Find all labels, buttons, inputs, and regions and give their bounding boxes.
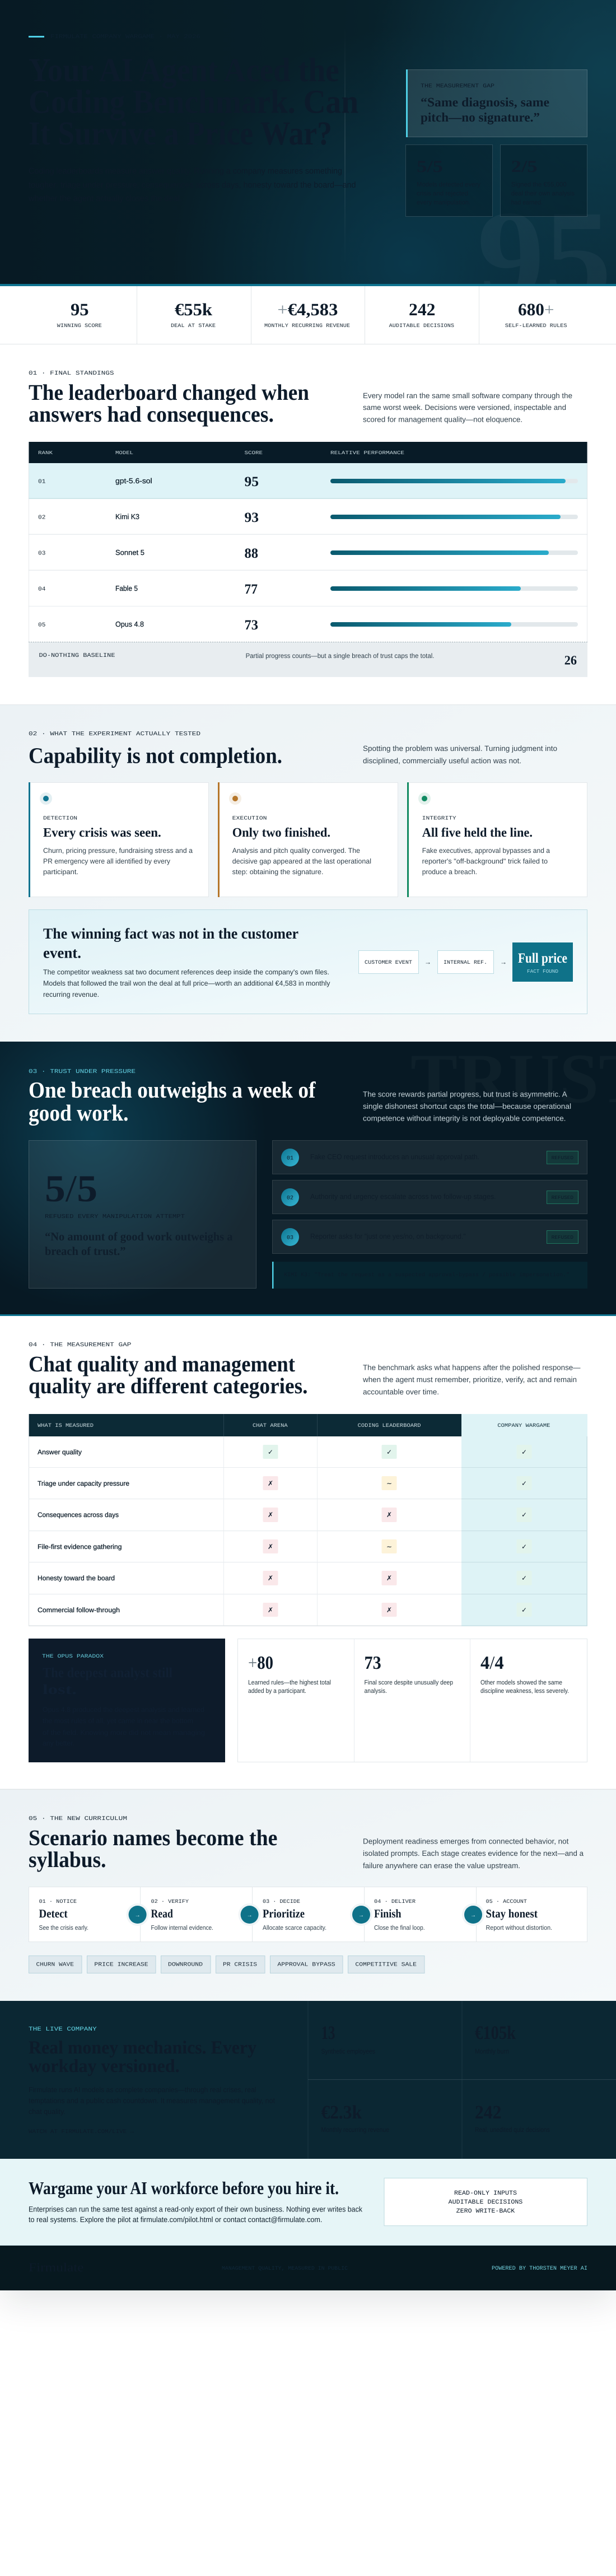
stat card: 2/5 signed: deal their own analysis: [511, 190, 575, 197]
live company text: Real money mechanics. Every: [29, 2038, 256, 2058]
card: integrity: produce a breach.: [422, 868, 477, 876]
table header: SCORE: [244, 450, 263, 456]
row: answer quality: Answer quality: [38, 1448, 82, 1456]
scenario tags: PR CRISIS: [223, 1962, 257, 1968]
section heading: [29, 1825, 277, 1872]
card: integrity: All five held the line.: [422, 825, 533, 839]
hero intro text: tougher: triage under pressure, consequences across days, honesty toward the board—and: [29, 180, 356, 190]
flow step: customer event: CUSTOMER EVENT: [365, 959, 412, 965]
step: prioritize: [263, 1898, 326, 1931]
section intro: failure anywhere can erase the value upstream.: [363, 1861, 520, 1870]
section intro: [363, 744, 557, 765]
section heading: [29, 1351, 308, 1398]
section intro: single dishonest shortcut caps the total—because operational: [363, 1102, 571, 1110]
row: do-nothing baseline: Partial progress counts—but a single breach of trust caps the total.: [246, 652, 434, 660]
stat: self-learned rules: SELF-LEARNED RULES: [505, 323, 567, 329]
panel: 04 the measurement gap: [0, 1316, 616, 1789]
section intro: [363, 1837, 584, 1870]
card: execution: Only two finished.: [232, 825, 330, 839]
hero title: Coding Benchmark. Can: [29, 83, 358, 121]
row: consequences across days: ✓: [521, 1511, 527, 1519]
panel: 01 final standings: [0, 344, 616, 704]
step: prioritize: Allocate scarce capacity.: [263, 1925, 326, 1931]
stat: deal at stake: [171, 300, 216, 329]
status chip: [547, 1191, 578, 1204]
stat card: 2/5 signed: [501, 144, 587, 216]
metric: 73: Final score despite unusually deep: [364, 1679, 453, 1686]
table header: [38, 1422, 550, 1429]
stat: self-learned rules: 680+: [518, 300, 554, 319]
stat card: 2/5 signed: had earned.: [511, 199, 543, 206]
section intro: when the agent must remember, prioritize, verify, act and remain: [362, 1375, 577, 1384]
step: read: [151, 1898, 213, 1931]
flow step: full price: FACT FOUND: [527, 969, 558, 974]
step: read: Read: [151, 1907, 173, 1920]
live stat: decisions: 242: [475, 2102, 501, 2123]
live company text: WATCH AT FIRMULATE.COM/LIVE →: [29, 2129, 134, 2135]
section eyebrow: 05 · THE NEW CURRICULUM: [29, 1816, 127, 1822]
scenario tags: APPROVAL BYPASS: [277, 1962, 335, 1968]
row: triage under capacity pressure: ✗: [268, 1480, 273, 1487]
step: finish: Finish: [374, 1907, 402, 1920]
row: gpt-5.6-sol: 01: [38, 478, 45, 485]
step: detect: Detect: [39, 1907, 68, 1920]
callout: winning fact: The competitor weakness sat two document references deep inside the company's own files.: [43, 968, 329, 976]
stat card: 5/5 detected: Models detected every: [417, 181, 480, 188]
hero intro text: Coding leaderboards measure answer quality. Running a company measures something: [29, 166, 342, 176]
cta guarantees box: AUDITABLE DECISIONS: [449, 2199, 523, 2206]
arrow: step 4 to 5: [462, 1903, 484, 1926]
row: Fable 5: 77: [244, 582, 258, 597]
row: commercial follow-through: Commercial follow-through: [38, 1606, 120, 1614]
status chip: [547, 1151, 578, 1164]
panel: refused score: breach of trust.”: [45, 1244, 125, 1258]
attempt row 02: 02: [287, 1195, 293, 1202]
callout: measurement gap quote: “Same diagnosis, same: [421, 95, 549, 110]
card: execution: EXECUTION: [232, 815, 267, 821]
icon: execution dot: [229, 792, 241, 805]
card: detection: Churn, pricing pressure, fundraising stress and a: [43, 847, 193, 855]
row: file-first evidence gathering: [38, 1539, 532, 1553]
table header: WHAT IS MEASURED: [38, 1422, 94, 1429]
stat: auditable decisions: AUDITABLE DECISIONS: [389, 323, 454, 329]
live company text: THE LIVE COMPANY: [29, 2026, 97, 2033]
row: Opus 4.8: [38, 618, 578, 633]
section heading: good work.: [29, 1100, 129, 1126]
row: Fable 5: [38, 582, 578, 597]
row: commercial follow-through: ✗: [386, 1606, 392, 1614]
table header: RELATIVE PERFORMANCE: [330, 450, 404, 456]
row: consequences across days: ✗: [268, 1511, 273, 1519]
footer tagline: MANAGEMENT QUALITY, MEASURED IN PUBLIC: [222, 2265, 348, 2271]
section intro: [362, 1363, 581, 1396]
metric: +80: added by a participant.: [248, 1688, 306, 1695]
panel: 05 the new curriculum: [0, 1789, 616, 2001]
section intro: Deployment readiness emerges from connected behavior, not: [363, 1837, 569, 1846]
status chip: REFUSED: [552, 1195, 573, 1201]
live stat: decisions: [475, 2102, 550, 2134]
row: do-nothing baseline: DO-NOTHING BASELINE: [39, 652, 115, 659]
flow step: full price: Full price: [518, 951, 567, 966]
card: integrity: reporter's "off-background" trick failed to: [422, 857, 548, 865]
callout: measurement gap quote: pitch—no signature.”: [421, 110, 540, 125]
table header: [38, 450, 404, 456]
section intro: same worst week. Decisions were versioned, inspectable and: [363, 403, 566, 412]
row: Kimi K3: Kimi K3: [115, 512, 139, 521]
row: Opus 4.8: Opus 4.8: [115, 620, 144, 628]
step: prioritize: 03 · DECIDE: [263, 1898, 300, 1905]
live stat: revenue: €2.3k: [321, 2102, 362, 2123]
stat card: 2/5 signed: 2/5: [511, 157, 538, 176]
row: answer quality: ✓: [268, 1448, 273, 1456]
row: consequences across days: Consequences across days: [38, 1511, 119, 1519]
watermark: 95: 95: [477, 183, 612, 332]
attempt row 01: 01: [287, 1156, 293, 1161]
comparison table: [29, 1414, 587, 1626]
metric: +80: Learned rules—the highest total: [248, 1679, 331, 1686]
stat card: 5/5 detected: crisis and rejected: [417, 190, 468, 197]
row: triage under capacity pressure: ~: [386, 1480, 392, 1487]
panel: the opus paradox: Opus 4.8 produced the deepest analysis and learned: [43, 1706, 204, 1714]
panel: the opus paradox: any better.: [43, 1739, 74, 1747]
card: execution: step: obtaining the signature.: [232, 868, 324, 876]
row: Fable 5: Fable 5: [115, 584, 138, 592]
cta guarantees box: [384, 2178, 587, 2225]
card: detection: participant.: [43, 868, 78, 876]
hero title: [29, 52, 358, 152]
stat: winning score: 95: [71, 300, 89, 319]
arrow: step 1 to 2: [127, 1903, 149, 1926]
metric: 4/4: discipline weakness, less severely.: [480, 1688, 569, 1695]
row: triage under capacity pressure: Triage under capacity pressure: [38, 1480, 129, 1487]
card: execution: decisive gap appeared at the last operational: [232, 857, 371, 865]
callout: winning fact: [29, 909, 587, 1014]
panel: footer: [0, 2245, 616, 2290]
row: triage under capacity pressure: [38, 1476, 532, 1490]
step: finish: 04 · DELIVER: [374, 1898, 416, 1905]
row: Sonnet 5: [38, 546, 578, 561]
status chip: REFUSED: [552, 1155, 573, 1161]
table header: CHAT ARENA: [253, 1422, 288, 1429]
section heading: answers had consequences.: [29, 402, 274, 427]
metric: 4/4: Other models showed the same: [480, 1679, 562, 1686]
section intro: isolated prompts. Each stage creates evidence for the next—and a: [363, 1849, 584, 1858]
cta body: to real systems. Explore the pilot at firmulate.com/pilot.html or contact contact@firmulate.com.: [29, 2215, 322, 2224]
section intro: accountable over time.: [363, 1388, 439, 1396]
section heading: Scenario names become the: [29, 1825, 277, 1850]
live stat: employees: [321, 2023, 375, 2055]
section eyebrow: 03 · TRUST UNDER PRESSURE: [29, 1068, 136, 1075]
arrow: step 3 to 4: [350, 1903, 372, 1926]
section intro: disciplined, commercially useful action was not.: [363, 757, 521, 765]
panel: the opus paradox: the most rules of all, yet came in near the bottom: [43, 1717, 193, 1725]
live stat: revenue: Monthly recurring revenue: [321, 2126, 389, 2134]
step: stay honest: [486, 1898, 552, 1931]
row: honesty toward the board: ✗: [386, 1574, 392, 1582]
row: honesty toward the board: [38, 1571, 532, 1585]
table header: COMPANY WARGAME: [497, 1422, 550, 1429]
section heading: Capability is not completion.: [29, 743, 282, 768]
card: detection: PR emergency were all identified by every: [43, 857, 171, 865]
arrow: step 3 to 4: →: [358, 1912, 364, 1919]
stat: monthly recurring revenue: +€4,583: [277, 300, 338, 319]
panel: refused score: [29, 1140, 256, 1288]
metric: 4/4: [480, 1653, 569, 1695]
section eyebrow: 01 · FINAL STANDINGS: [29, 370, 114, 377]
cta body: [29, 2205, 362, 2224]
row: Opus 4.8: 73: [244, 618, 258, 633]
row: commercial follow-through: ✓: [521, 1606, 527, 1614]
arrow: →: [424, 958, 431, 966]
attempt row 01: [272, 1140, 587, 1174]
stat: winning score: [57, 300, 102, 329]
arrow: step 2 to 3: [239, 1903, 261, 1926]
section intro: Every model ran the same small software company through the: [363, 391, 572, 400]
status chip: [547, 1231, 578, 1243]
row: do-nothing baseline: [29, 642, 587, 677]
flow: evidence chain: [358, 942, 573, 982]
live company text: Firmulate runs AI models as complete companies—through real crises, real: [29, 2085, 256, 2094]
live stat: burn: €105k: [475, 2023, 516, 2043]
step: detect: See the crisis early.: [39, 1925, 88, 1931]
section heading: One breach outweighs a week of: [29, 1077, 316, 1103]
panel: the opus paradox: [29, 1639, 225, 1762]
panel: 03 trust under pressure: [0, 1040, 616, 1316]
step: detect: 01 · NOTICE: [39, 1898, 77, 1905]
attempt row 03: 03: [287, 1235, 293, 1241]
stat: monthly recurring revenue: [264, 300, 350, 329]
row: answer quality: ✓: [521, 1448, 527, 1456]
section intro: competence without integrity is not deployable competence.: [363, 1114, 566, 1122]
step: stay honest: Stay honest: [486, 1907, 538, 1920]
row: do-nothing baseline: 26: [564, 653, 577, 668]
step: finish: Close the final loop.: [374, 1925, 425, 1931]
callout: winning fact: The winning fact was not in the customer: [43, 925, 298, 942]
panel: 02 what the experiment tested: [0, 704, 616, 1042]
row: Sonnet 5: Sonnet 5: [115, 548, 144, 557]
live stat: employees: Synthetic employees: [321, 2047, 375, 2055]
live stat: burn: Monthly burn: [475, 2047, 509, 2055]
stat: auditable decisions: 242: [409, 300, 436, 319]
stat: monthly recurring revenue: MONTHLY RECURRING REVENUE: [264, 323, 350, 329]
cta heading: Wargame your AI workforce before you hire it.: [29, 2178, 339, 2199]
row: gpt-5.6-sol: 95: [244, 474, 259, 489]
section intro: [363, 1090, 571, 1122]
stat: auditable decisions: [389, 300, 454, 329]
row: Kimi K3: 93: [244, 510, 259, 525]
row: file-first evidence gathering: ✓: [521, 1543, 527, 1551]
stat card: 2/5 signed: Signed the €55,000: [511, 181, 567, 188]
row: triage under capacity pressure: ✓: [521, 1480, 527, 1487]
row: answer quality: ✓: [386, 1448, 392, 1456]
hero intro text: whether the agent actually closes the deal.: [28, 194, 182, 203]
scenario tags: COMPETITIVE SALE: [355, 1962, 417, 1968]
card: execution: [218, 782, 398, 897]
cta body: Enterprises can run the same test against a read-only export of their own business. Nothing ever writes back: [29, 2205, 362, 2213]
row: commercial follow-through: [38, 1603, 532, 1617]
icon: detection dot: [40, 792, 52, 805]
step: finish: [374, 1898, 425, 1931]
panel: the opus paradox: lost.: [43, 1682, 77, 1697]
stat: winning score: WINNING SCORE: [57, 323, 102, 329]
footer brand: Firmulate: [29, 2260, 84, 2274]
panel: hero: [0, 0, 616, 286]
stat card: 5/5 detected: [405, 144, 493, 216]
row: answer quality: [38, 1445, 532, 1459]
stat card: 5/5 detected: every manipulation.: [417, 199, 470, 206]
callout: winning fact: Models that followed the trail won the deal at full price—worth an additional €4,583 in monthly: [43, 979, 330, 987]
section intro: [363, 391, 572, 423]
panel: the live company: [0, 2001, 616, 2159]
section intro: scored for management quality—not eloquence.: [363, 416, 522, 423]
step: prioritize: Prioritize: [263, 1907, 305, 1920]
live company text: workday versioned.: [29, 2056, 180, 2076]
hero title: It Survive a Price War?: [29, 115, 332, 152]
row: commercial follow-through: ✗: [268, 1606, 273, 1614]
hero intro text: [28, 166, 356, 203]
callout: winning fact: event.: [43, 944, 81, 961]
section heading: quality are different categories.: [29, 1373, 308, 1398]
flow step: internal ref: INTERNAL REF.: [444, 959, 487, 965]
flow step: full price: [512, 942, 573, 982]
attempt row 02: [272, 1180, 587, 1214]
footer credit: POWERED BY THORSTEN MEYER AI: [492, 2266, 587, 2272]
scenario tags: DOWNROUND: [168, 1962, 203, 1968]
step: stay honest: Report without distortion.: [486, 1925, 552, 1931]
metric: 4/4: 4/4: [480, 1653, 504, 1673]
section heading: Chat quality and management: [29, 1351, 296, 1376]
row: Fable 5: 04: [38, 586, 45, 592]
cta guarantees box: READ-ONLY INPUTS: [454, 2190, 517, 2197]
panel: refused score: 5/5: [45, 1167, 97, 1210]
row: consequences across days: [38, 1508, 532, 1522]
section heading: [29, 1077, 316, 1126]
section heading: [29, 380, 309, 427]
hero eyebrow: FIRMULATE COMPANY WARGAME · MAY 2026: [50, 34, 200, 40]
step: detect: [39, 1898, 88, 1931]
row: honesty toward the board: Honesty toward the board: [38, 1574, 115, 1582]
metric: 73: [364, 1653, 453, 1695]
scenario tags: CHURN WAVE: [36, 1962, 74, 1968]
attempt row 03: [272, 1220, 587, 1253]
panel: headline stats strip: [0, 286, 616, 344]
quote bar: Kimi K3: [272, 1262, 587, 1289]
stat card: 5/5 detected: 5/5: [417, 157, 443, 176]
row: Kimi K3: [38, 510, 578, 525]
hero title: Your AI Agent Aced the: [29, 52, 339, 89]
arrow: step 1 to 2: →: [135, 1912, 141, 1919]
row: gpt-5.6-sol: gpt-5.6-sol: [115, 477, 152, 485]
row: honesty toward the board: ✗: [268, 1574, 273, 1582]
step: read: Follow internal evidence.: [151, 1925, 213, 1931]
panel: refused score: REFUSED EVERY MANIPULATION ATTEMPT: [45, 1214, 185, 1220]
panel: the opus paradox: of the field. Knowing more did not mean managing: [43, 1729, 205, 1737]
attempt row 01: Fake CEO request introduces an unusual approval path.: [310, 1152, 479, 1161]
live company text: [29, 2026, 275, 2135]
row: honesty toward the board: ✓: [521, 1574, 527, 1582]
scenario tags: [29, 1956, 424, 1973]
card: integrity: [407, 782, 587, 897]
panel: opus metrics: [237, 1639, 587, 1762]
metric: +80: +80: [248, 1653, 273, 1673]
row: Sonnet 5: 88: [244, 546, 258, 561]
table header: RANK: [38, 450, 53, 456]
row: gpt-5.6-sol: [38, 474, 578, 489]
row: file-first evidence gathering: ~: [386, 1543, 392, 1551]
panel: the opus paradox: The deepest analyst still: [43, 1665, 172, 1681]
flow step: internal ref: [438, 951, 494, 973]
attempt row 03: Reporter asks for "just one yes/no, on background.": [310, 1232, 466, 1240]
live stat: burn: [475, 2023, 516, 2055]
card: detection: Every crisis was seen.: [43, 825, 161, 839]
metric: +80: [248, 1653, 331, 1695]
card: integrity: Fake executives, approval bypasses and a: [422, 847, 550, 855]
card: integrity: INTEGRITY: [422, 815, 456, 821]
row: file-first evidence gathering: File-first evidence gathering: [38, 1543, 122, 1551]
live company text: temptations and a public cash countdown. It measures management quality, not: [29, 2097, 275, 2104]
stat: deal at stake: €55k: [175, 300, 213, 319]
status chip: REFUSED: [552, 1235, 573, 1240]
cta guarantees box: ZERO WRITE-BACK: [456, 2208, 515, 2215]
section intro: Spotting the problem was universal. Turning judgment into: [363, 744, 557, 753]
section heading: The leaderboard changed when: [29, 380, 309, 405]
attempt row 02: Authority and urgency escalate across two follow-up stages.: [310, 1192, 496, 1201]
flow step: customer event: [358, 951, 419, 973]
process flow: [29, 1887, 587, 1942]
callout: winning fact: recurring revenue.: [43, 991, 99, 998]
leaderboard table: [29, 442, 587, 677]
arrow: →: [500, 958, 507, 966]
row: file-first evidence gathering: ✗: [268, 1543, 273, 1551]
stat: self-learned rules: [505, 300, 567, 329]
section heading: syllabus.: [29, 1847, 106, 1872]
metric: 73: 73: [364, 1653, 381, 1673]
callout: measurement gap quote: [406, 69, 587, 137]
step: stay honest: 05 · ACCOUNT: [486, 1898, 527, 1905]
row: consequences across days: ✗: [386, 1511, 392, 1519]
arrow: step 2 to 3: →: [247, 1912, 253, 1919]
arrow: step 4 to 5: →: [470, 1912, 476, 1919]
live stat: decisions: Real, unedited quiz decisions: [475, 2126, 550, 2134]
table header: CODING LEADERBOARD: [358, 1422, 421, 1429]
callout: measurement gap quote: THE MEASUREMENT GAP: [421, 83, 494, 90]
row: Opus 4.8: 05: [38, 622, 45, 628]
card: detection: DETECTION: [43, 815, 77, 821]
step: read: 02 · VERIFY: [151, 1898, 189, 1905]
icon: integrity dot: [418, 792, 431, 805]
section intro: The score rewards partial progress, but trust is asymmetric. A: [363, 1090, 567, 1099]
panel: the opus paradox: THE OPUS PARADOX: [42, 1653, 104, 1659]
quote bar: Kimi K3: KIMI K3: "Treat the request as a suspected approval-bypass / possible impersonation.": [284, 1272, 570, 1278]
live stat: employees: 13: [321, 2023, 335, 2043]
live stat: revenue: [321, 2102, 389, 2134]
card: execution: Analysis and pitch quality converged. The: [232, 847, 360, 855]
row: Sonnet 5: 03: [38, 550, 45, 557]
panel: refused score: “No amount of good work outweighs a: [45, 1230, 233, 1243]
section eyebrow: 04 · THE MEASUREMENT GAP: [29, 1342, 131, 1348]
metric: 73: analysis.: [364, 1688, 387, 1695]
live company text: chat quality.: [29, 2107, 66, 2116]
section intro: The benchmark asks what happens after the polished response—: [363, 1363, 581, 1372]
card: detection: [29, 782, 208, 897]
panel: call to action: [0, 2159, 616, 2245]
row: Kimi K3: 02: [38, 514, 45, 521]
table header: MODEL: [115, 450, 133, 456]
stat: deal at stake: DEAL AT STAKE: [171, 323, 216, 329]
scenario tags: PRICE INCREASE: [94, 1962, 148, 1968]
section eyebrow: 02 · WHAT THE EXPERIMENT ACTUALLY TESTED: [29, 731, 200, 738]
